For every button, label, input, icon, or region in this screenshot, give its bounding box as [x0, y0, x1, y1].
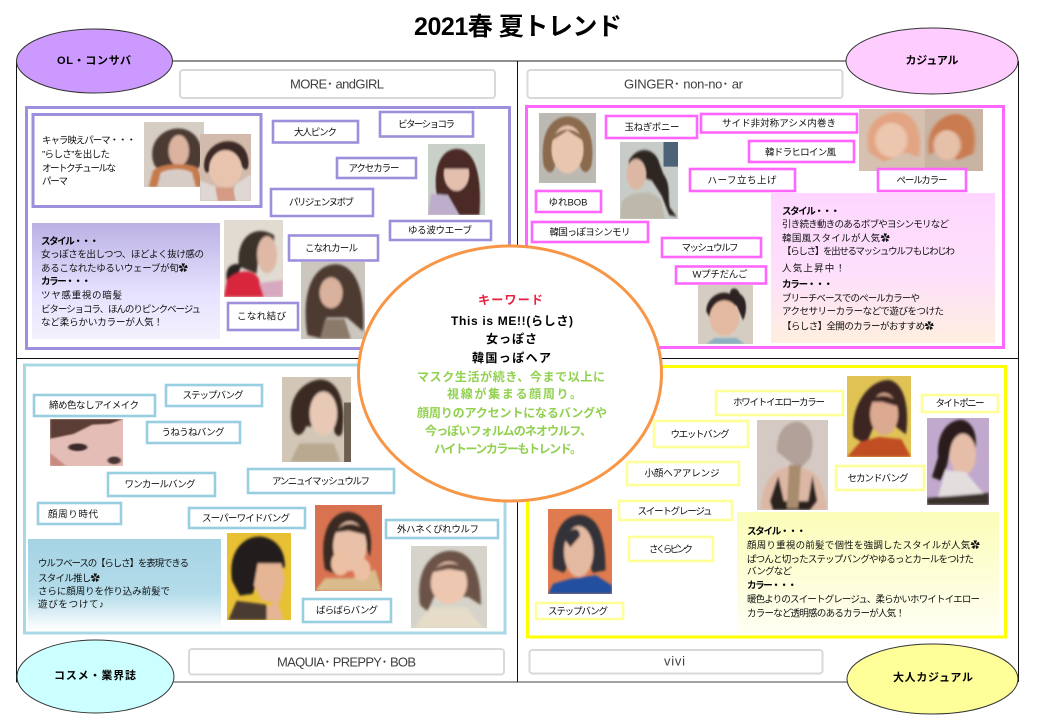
label — [532, 222, 648, 242]
label: こなれカール — [305, 244, 358, 254]
photo: step bang — [548, 509, 612, 594]
label: ゆる波ウエーブ — [408, 224, 472, 236]
label: 小顔ヘアアレンジ — [644, 468, 720, 480]
magazine box: MORE andGIRL: MORE･ andGIRL — [290, 76, 384, 92]
label — [390, 221, 491, 240]
label — [189, 508, 305, 528]
photo: swaying bob — [539, 113, 596, 183]
label — [749, 141, 854, 162]
label — [386, 520, 498, 538]
text block: wolf base recommendation: スタイル推し✿ — [38, 572, 100, 584]
feature box: character perm: オートクチュールな — [42, 164, 116, 174]
panel: OL conservative trends — [26, 108, 510, 348]
label — [303, 599, 391, 622]
text block: style and colour: スタイル・・・ — [41, 236, 99, 248]
label — [627, 462, 739, 485]
text block: style and colour — [737, 512, 999, 635]
text block: style and colour: 【らしさ】を出せるマッシュウルフもじわじわ — [782, 246, 955, 258]
label: 大人ピンク — [294, 126, 337, 138]
text block: style and colour: 女っぽさを出しつつ、ほどよく抜け感の — [41, 248, 204, 260]
text block: wolf base recommendation: さらに顔周りを作り込み前髪で — [38, 586, 170, 598]
photo: eye makeup — [50, 419, 123, 466]
magazine box: GINGER non-no ar — [528, 70, 842, 98]
label — [676, 266, 766, 284]
text block: style and colour: アクセサリーカラーなどで遊びをつけた — [782, 306, 944, 318]
magazine box: GINGER non-no ar: GINGER･ non-no･ ar — [624, 76, 744, 92]
feature box: character perm: パーマ — [42, 176, 68, 188]
label — [878, 169, 966, 191]
text block: style and colour: 暖色よりのスイートグレージュ、柔らかいホワイトイエロー — [747, 594, 980, 606]
text block: style and colour: 引き続き動きのあるボブやヨシンモリなど — [782, 218, 949, 230]
text block: style and colour: カラー・・・ — [41, 276, 91, 288]
photo: wavy medium — [411, 546, 487, 628]
text block: style and colour: スタイル・・・ — [782, 206, 840, 218]
label — [271, 189, 373, 216]
label: スーパーワイドバング — [202, 512, 290, 524]
text block: style and colour — [32, 223, 220, 339]
text block: style and colour: ブリーチベースでのペールカラーや — [782, 292, 920, 304]
label: ホワイトイエローカラー — [733, 398, 825, 408]
photo: long wavy hair — [428, 144, 485, 215]
labels — [532, 114, 966, 284]
photo: ennui mash wolf — [282, 377, 351, 462]
feature box: character perm: キャラ映えパーマ・・・ — [42, 134, 136, 146]
labels — [536, 391, 998, 619]
category: adult casual — [847, 644, 1018, 714]
category: OL conservative: OL・コンサバ — [57, 54, 131, 67]
label — [662, 238, 761, 257]
green description — [417, 369, 607, 456]
magazine box: MORE andGIRL — [180, 70, 495, 98]
keywords — [451, 314, 573, 365]
label: パリジェンヌボブ — [289, 196, 354, 208]
label: 韓国っぽヨシンモリ — [550, 226, 630, 238]
text block: style and colour: ツヤ感重視の暗髪 — [41, 290, 122, 302]
label: セカンドバング — [848, 472, 909, 484]
feature box: character perm — [33, 114, 261, 206]
keywords: 女っぽさ — [486, 331, 537, 346]
magazine box: MAQUIA PREPPY BOB: MAQUIA･ PREPPY･ BOB — [277, 654, 416, 670]
green description: 視線が集まる顔周り。 — [447, 386, 582, 401]
title: 2021春 夏トレンド — [414, 13, 622, 41]
category: casual — [846, 28, 1018, 94]
label — [289, 236, 378, 260]
label — [108, 473, 215, 496]
label: ワンカールバング — [124, 478, 196, 490]
label: こなれ結び — [237, 310, 286, 322]
label — [701, 114, 857, 132]
label: サイド非対称アシメ内巻き — [722, 118, 836, 130]
text block: style and colour — [771, 193, 995, 343]
photo: wet back ponytail — [757, 420, 828, 510]
text block: style and colour: ビターショコラ、ほんのりピンクベージュ — [41, 304, 201, 316]
text block: wolf base recommendation: ウルフベースの【らしさ】を表現できる — [38, 558, 189, 570]
label — [629, 537, 713, 561]
label — [654, 421, 748, 447]
label: ペールカラー — [896, 176, 948, 186]
text block: style and colour: バングなど — [747, 566, 792, 578]
label: さくらピンク — [649, 544, 693, 556]
green description: 顔周りのアクセントになるバングや — [417, 405, 607, 420]
label: ビターショコラ — [398, 120, 455, 130]
label — [228, 303, 298, 330]
label — [922, 395, 998, 412]
center keyword circle — [358, 246, 662, 501]
photo: tight pony — [927, 418, 989, 505]
category: adult casual: 大人カジュアル — [893, 670, 973, 684]
keywords: 韓国っぽヘア — [472, 350, 551, 365]
photo: onion ponytail — [620, 142, 678, 219]
label — [836, 466, 924, 490]
label: 韓ドラヒロイン風 — [765, 146, 836, 158]
label: マッシュウルフ — [682, 243, 738, 254]
label: 玉ねぎポニー — [624, 122, 680, 134]
photo: second bang — [847, 376, 911, 457]
photo: super wide bang — [227, 533, 291, 620]
label — [147, 422, 240, 443]
category: cosme and trade magazines: コスメ・業界誌 — [54, 668, 136, 682]
feature box: character perm: ”らしさ”を出した — [42, 148, 110, 160]
panel: cosme trends — [24, 365, 505, 633]
text block: style and colour: 【らしさ】全開のカラーがおすすめ✿ — [782, 320, 934, 332]
label — [690, 169, 795, 191]
label: 締め色なしアイメイク — [49, 400, 139, 412]
text block: wolf base recommendation — [28, 539, 221, 630]
photo: double bun — [698, 285, 753, 344]
text block: style and colour: カラーなど透明感のあるカラーが人気！ — [747, 608, 905, 620]
label: 顔周り時代 — [48, 508, 98, 520]
label: ハーフ立ち上げ — [708, 174, 777, 186]
text block: style and colour: 韓国風スタイルが人気✿ — [782, 232, 890, 244]
green description: マスク生活が続き、今まで以上に — [417, 369, 605, 384]
green description: ハイトーンカラーもトレンド。 — [434, 442, 582, 456]
panel: casual trends — [526, 106, 1004, 348]
label: タイトポニー — [936, 398, 984, 410]
label: スイートグレージュ — [638, 506, 712, 518]
text block: style and colour: 人気上昇中！ — [782, 262, 845, 274]
text block: wolf base recommendation: 遊びをつけて♪ — [38, 598, 104, 610]
text block: style and colour: カラー・・・ — [782, 280, 833, 290]
label — [273, 121, 358, 142]
label — [337, 158, 416, 178]
panel: adult casual trends — [528, 366, 1006, 637]
label: アクセカラー — [348, 164, 400, 174]
label — [380, 112, 473, 136]
photo: flared wolf — [315, 505, 382, 591]
text block: style and colour: 顔周り重視の前髪で個性を強調したスタイルが人気✿ — [747, 540, 980, 552]
text block: style and colour: スタイル・・・ — [747, 526, 806, 538]
text block: style and colour: あるこなれたゆるいウェーブが旬✿ — [41, 262, 188, 274]
label — [606, 116, 697, 138]
label: ゆれBOB — [548, 198, 588, 208]
label: アンニュイマッシュウルフ — [272, 476, 370, 488]
label: ウエットバング — [670, 428, 730, 440]
label: Wプチだんご — [692, 268, 748, 280]
magazine box: MAQUIA PREPPY BOB — [189, 649, 504, 674]
labels — [228, 112, 491, 330]
text block: style and colour: など柔らかいカラーが人気！ — [41, 316, 163, 328]
magazine box: vivi — [530, 650, 822, 674]
label: ステップバング — [548, 606, 608, 618]
magazine box: vivi: vivi — [664, 654, 685, 668]
category: casual: カジュアル — [906, 54, 958, 67]
labels — [34, 385, 498, 622]
text block: style and colour: カラー・・・ — [747, 580, 797, 592]
photo: loose curls — [301, 262, 365, 339]
label — [166, 385, 262, 406]
category: cosme and trade magazines — [17, 640, 174, 713]
label: うねうねバング — [162, 426, 225, 438]
label: 外ハネくびれウルフ — [397, 524, 479, 536]
category: OL conservative — [16, 29, 172, 93]
photo: pale colour pair — [859, 109, 983, 171]
label — [38, 503, 121, 524]
keywords: This is ME!!(らしさ) — [451, 314, 573, 328]
label: ステップバング — [182, 390, 244, 402]
keyword heading: キーワード — [478, 293, 543, 307]
label — [34, 395, 155, 416]
photo: side ponytail — [224, 220, 283, 297]
label: ばらばらバング — [316, 604, 378, 616]
label — [536, 191, 601, 212]
green description: 今っぽいフォルムのネオウルフ、 — [425, 423, 592, 438]
label — [248, 469, 394, 493]
label — [619, 501, 732, 520]
label — [716, 391, 843, 415]
label — [536, 603, 623, 619]
text block: style and colour: ぱつんと切ったステップバングやゆるっとカールをつけた — [747, 554, 974, 566]
